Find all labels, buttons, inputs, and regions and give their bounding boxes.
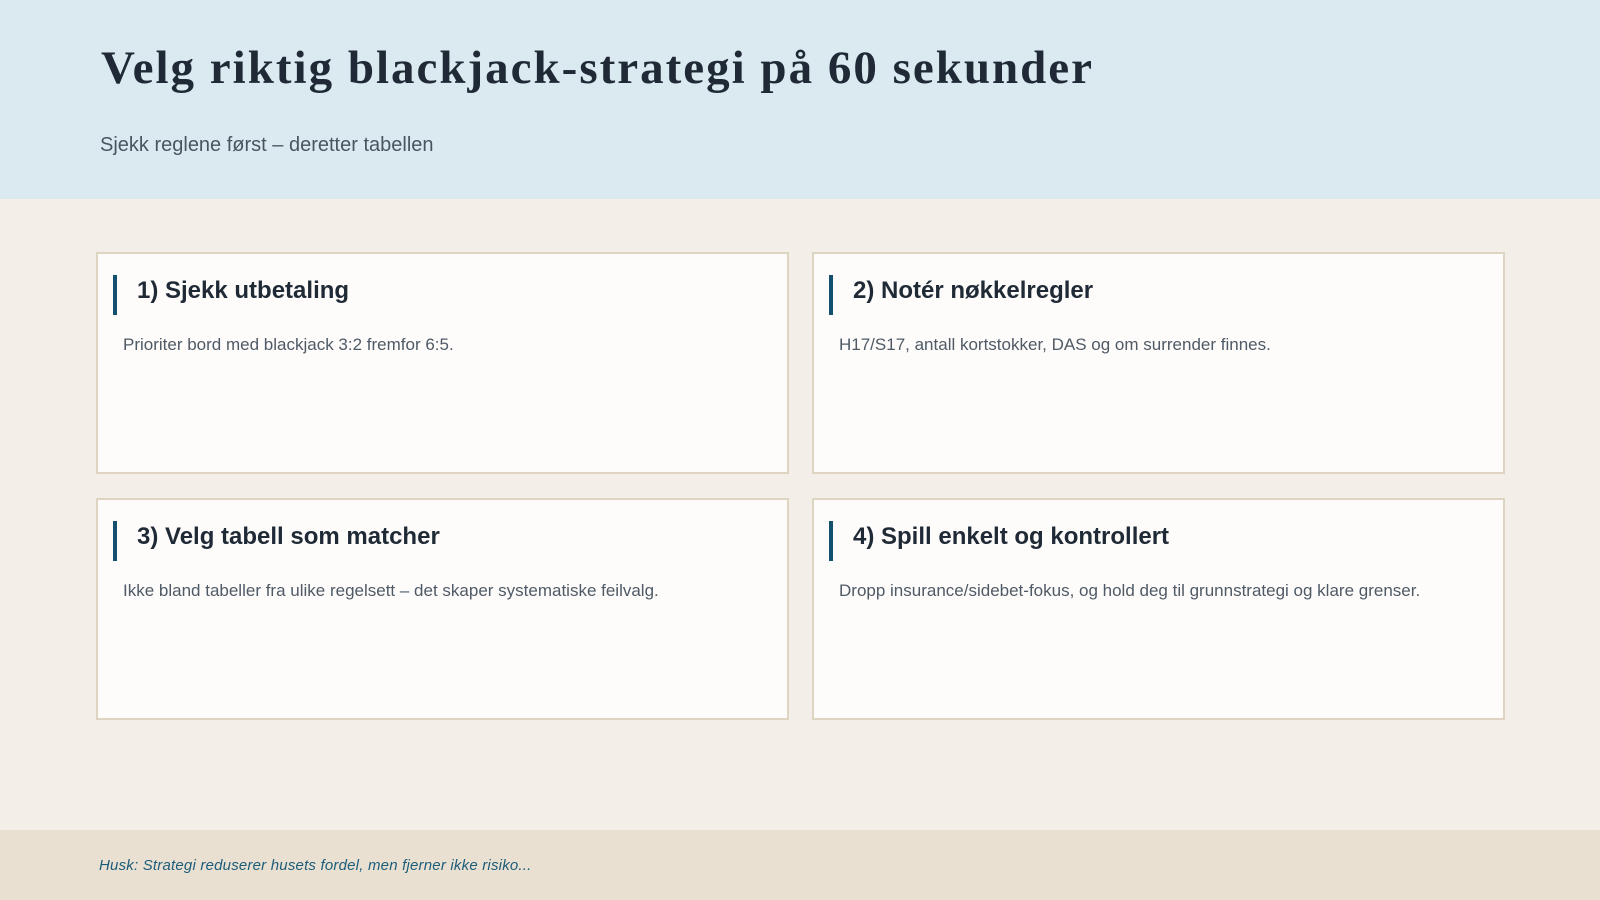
heading: 3) Velg tabell som matcher [137, 523, 440, 550]
body text: Dropp insurance/sidebet-fokus, og hold deg til grunnstrategi og klare grenser. [839, 581, 1420, 600]
accent bar [829, 521, 833, 561]
panel: step 4 [812, 498, 1505, 720]
title: Velg riktig blackjack-strategi på 60 sekunder [101, 42, 1094, 94]
heading: 4) Spill enkelt og kontrollert [853, 523, 1169, 550]
heading: 2) Notér nøkkelregler [853, 277, 1093, 304]
heading: 1) Sjekk utbetaling [137, 277, 349, 304]
body text: Ikke bland tabeller fra ulike regelsett – det skaper systematiske feilvalg. [123, 581, 659, 600]
header band [0, 0, 1600, 199]
panel: step 3 [96, 498, 789, 720]
footer note: Husk: Strategi reduserer husets fordel, men fjerner ikke risiko... [99, 857, 532, 874]
body text: Prioriter bord med blackjack 3:2 fremfor 6:5. [123, 335, 454, 354]
panel: step 2 [812, 252, 1505, 474]
body text: H17/S17, antall kortstokker, DAS og om surrender finnes. [839, 335, 1271, 354]
panel: step 1 [96, 252, 789, 474]
footer band [0, 830, 1600, 900]
subtitle: Sjekk reglene først – deretter tabellen [100, 134, 434, 156]
accent bar [113, 521, 117, 561]
accent bar [113, 275, 117, 315]
accent bar [829, 275, 833, 315]
